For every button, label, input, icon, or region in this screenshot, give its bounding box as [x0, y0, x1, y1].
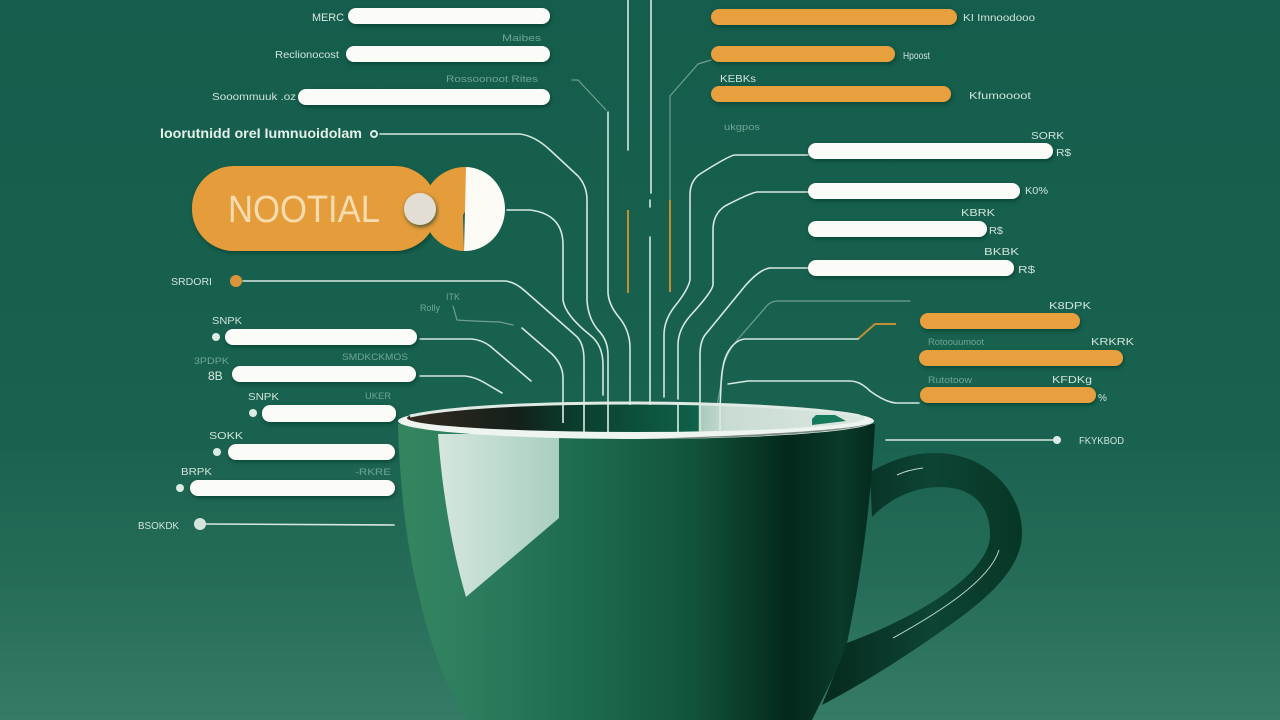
handle highlight — [893, 468, 999, 638]
bar 8 — [190, 480, 395, 496]
round end white — [464, 167, 505, 251]
right white bars — [808, 131, 1071, 276]
bar 4 label: SNPK — [212, 316, 242, 327]
orange bar 5 left label: Rotoouumoot — [928, 337, 985, 347]
knob — [404, 193, 436, 225]
bar 5 — [232, 366, 416, 382]
faint center labels: ITK — [446, 292, 460, 302]
orange bar 6 left label: Rutotoow — [928, 375, 973, 385]
bottom left marker row: BSOKDK — [138, 521, 179, 532]
white bar 2 value: K0% — [1025, 186, 1048, 197]
body — [398, 424, 875, 720]
bar 8 marker — [176, 484, 184, 492]
orange bar 4 — [920, 313, 1080, 329]
bar 1 — [348, 8, 550, 24]
white bar 4 top label: BKBK — [984, 247, 1019, 258]
orange bar 2 — [711, 46, 895, 62]
bar 3 label: Sooommuuk .oz — [212, 92, 296, 103]
cup inner — [407, 404, 865, 432]
bar 7 — [228, 444, 395, 460]
white bar 1 — [808, 143, 1053, 159]
rim — [398, 403, 874, 439]
bar 2 label: Reclionocost — [275, 50, 339, 61]
faint center labels — [420, 292, 460, 313]
marker row 1 — [171, 275, 242, 288]
inner notch — [812, 415, 846, 425]
bar 2 — [346, 46, 550, 62]
left lower bars — [176, 316, 417, 496]
bar 2 note: Maibes — [502, 33, 542, 43]
orange bar 3 label: Kfumoooot — [969, 91, 1031, 102]
white bar 3 top label: KBRK — [961, 208, 995, 219]
orange bar 6 right label: KFDKg — [1052, 375, 1092, 386]
faint note: ukgpos — [724, 122, 761, 132]
bar 5 note: SMDKCKMOS — [342, 352, 408, 362]
bar 7 label: SOKK — [209, 431, 243, 442]
bar 8 label: BRPK — [181, 467, 212, 478]
rim shadow — [636, 422, 874, 439]
white bar 1 value: R$ — [1056, 148, 1071, 159]
glare — [438, 434, 559, 597]
left top bars — [212, 8, 550, 105]
bar 6 note: UKER — [365, 391, 392, 401]
bar 3 note: Rossoonoot Rites — [446, 74, 539, 84]
bar 7 marker — [213, 448, 221, 456]
right lower orange bars — [919, 301, 1134, 404]
pill body — [192, 166, 437, 251]
orange bar 4 label: K8DPK — [1049, 301, 1091, 312]
orange bar 6 value: % — [1098, 393, 1107, 404]
bar 6 — [262, 405, 396, 422]
bar 5 label: 3PDPK — [194, 356, 229, 366]
inner lines — [563, 403, 720, 432]
white bar 4 value: R$ — [1018, 265, 1036, 276]
bar 3 — [298, 89, 550, 105]
orange bar 6 — [920, 387, 1096, 403]
white bar 3 — [808, 221, 987, 237]
orange pill callout — [192, 166, 505, 251]
white bar 2 — [808, 183, 1020, 199]
bar 6 marker — [249, 409, 257, 417]
handle — [822, 453, 1022, 705]
rim top edge — [410, 403, 860, 416]
right marker row — [886, 436, 1124, 447]
white bar 1 top label: SORK — [1031, 131, 1064, 142]
bar 6 label: SNPK — [248, 392, 279, 403]
round end orange — [423, 167, 466, 251]
right top orange bars — [711, 9, 1036, 132]
bar 4 marker — [212, 333, 220, 341]
orange bar 1 — [711, 9, 957, 25]
white bar 3 value: R$ — [989, 226, 1003, 237]
heading with dot marker: Ioorutnidd oreI Iumnuoidolam — [160, 126, 362, 141]
orange bar 3 — [711, 86, 951, 102]
bar 5 value: 8B — [208, 369, 223, 383]
orange bar 2 label: Hpoost — [903, 51, 930, 62]
orange bar 1 label: KI Imnoodooo — [963, 13, 1036, 24]
bar 8 note: -RKRE — [355, 467, 391, 477]
marker row 1: SRDORI — [171, 277, 212, 288]
orange bar 5 right label: KRKRK — [1091, 337, 1134, 348]
coffee mug — [398, 403, 1022, 720]
orange bar 3 note: KEBKs — [720, 74, 756, 85]
right marker row: FKYKBOD — [1079, 436, 1124, 447]
bar 1 label: MERC — [312, 12, 344, 24]
white bar 4 — [808, 260, 1014, 276]
bar 4 — [225, 329, 417, 345]
pill text: NOOTIAL — [228, 189, 380, 231]
faint center labels: Rolly — [420, 303, 441, 313]
bottom left marker row — [138, 518, 394, 532]
orange bar 5 — [919, 350, 1123, 366]
connector lines — [243, 0, 919, 432]
